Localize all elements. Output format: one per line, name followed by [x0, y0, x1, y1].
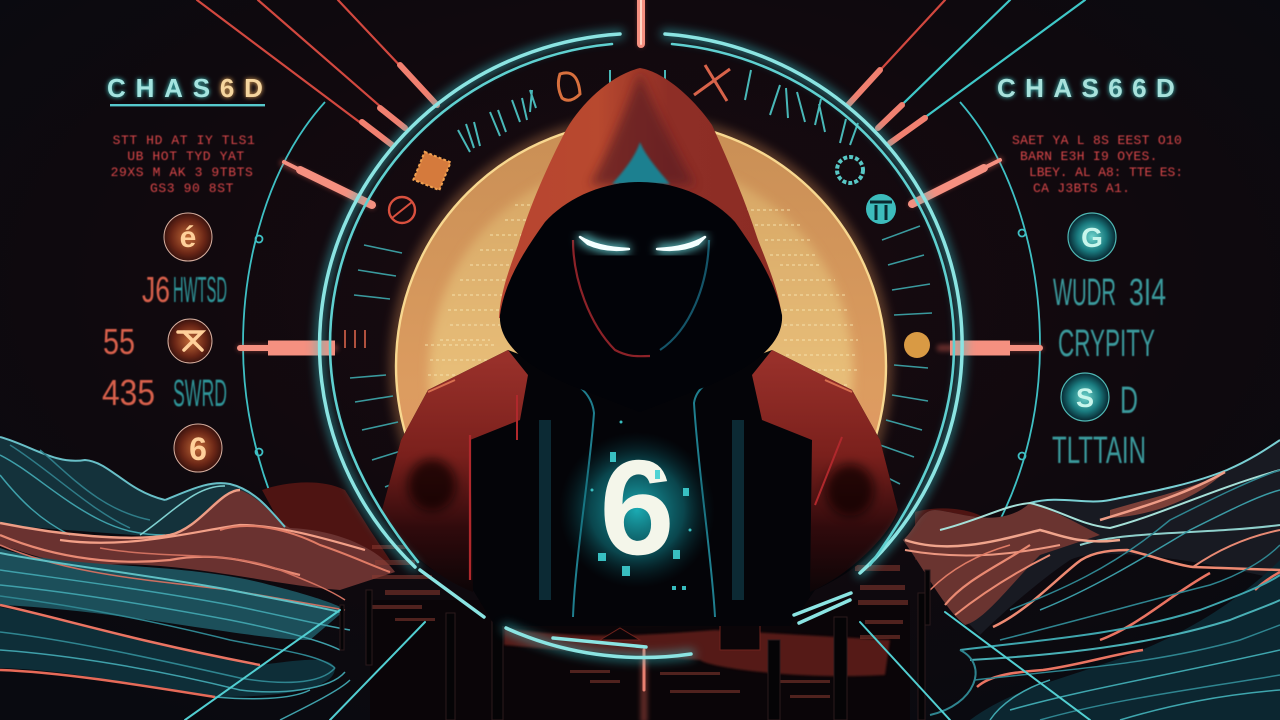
teal glyph clusters: [458, 70, 665, 152]
right title: CHAS66D: [997, 73, 1184, 103]
left paragraph: STT HD AT IY TLS1: [113, 133, 255, 148]
right icons: S: [1076, 383, 1094, 413]
right title: CHAS66D: [997, 73, 1184, 103]
hooded figure: [382, 68, 898, 626]
ruined city at bottom: [340, 545, 930, 720]
text: HWTSD: [173, 269, 227, 310]
right sleeve: [752, 350, 898, 592]
right paragraph: [1012, 133, 1183, 196]
right icons: G: [1081, 222, 1103, 253]
left sleeve: [382, 350, 528, 592]
right paragraph: LBEY. AL A8: TTE ES:: [1029, 165, 1183, 180]
left labels: [102, 269, 227, 415]
orange knot icon: [558, 73, 580, 100]
left red mound: [262, 482, 390, 560]
left paragraph: 29XS M AK 3 9TBTS: [111, 165, 253, 180]
left paragraph: [111, 133, 255, 196]
small orange dial: [904, 332, 930, 358]
jacket base: [382, 350, 898, 626]
right labels: TLTTAIN: [1052, 430, 1146, 472]
right labels: [1052, 272, 1166, 472]
left wave field: [0, 437, 395, 720]
left labels: J6: [142, 269, 170, 310]
hood: [499, 68, 782, 318]
main neon ring: [320, 34, 962, 658]
left icons: [164, 213, 222, 472]
sun script lines: [425, 205, 858, 400]
left paragraph: GS3 90 8ST: [150, 181, 234, 196]
teal flower icon: [837, 157, 863, 183]
jacket seams: [428, 380, 852, 580]
right ticks: [872, 226, 932, 484]
left title: CHAS6D: [107, 73, 273, 103]
glowing 6: [559, 432, 715, 588]
right labels: WUDR: [1053, 272, 1116, 314]
right red mound: [915, 508, 990, 560]
hood opening: [500, 182, 782, 412]
sun disc behind figure: [389, 114, 893, 618]
left labels: 55: [103, 321, 135, 362]
right labels: 3I4: [1129, 272, 1166, 314]
jacket shadow patches: [408, 459, 874, 516]
left icons: é: [180, 221, 196, 254]
right labels: D: [1120, 380, 1138, 422]
left title: CHAS6D: [107, 73, 273, 103]
left ticks: [350, 245, 410, 487]
eyes: [580, 237, 705, 250]
mask: [573, 240, 709, 356]
bottom teal rays: [185, 610, 1090, 720]
right paragraph: CA J3BTS A1.: [1033, 181, 1130, 196]
right icons: [1061, 213, 1116, 421]
hood crown shading: [590, 72, 695, 185]
right paragraph: BARN E3H I9 OYES.: [1020, 149, 1158, 164]
right labels: CRYPITY: [1058, 323, 1155, 365]
sparkles: [590, 420, 692, 590]
orange hatched icon: [413, 152, 451, 190]
towers: [340, 570, 930, 720]
red circle icon: [389, 197, 415, 223]
right wave field: [903, 440, 1280, 720]
left icons: 6: [189, 431, 207, 467]
teal circle icon: [866, 194, 896, 224]
inner ring ticks and symbols: [345, 65, 932, 487]
zipper collars: [525, 350, 756, 617]
neon pink bars and rays: [185, 0, 1090, 720]
glowing 6: 6: [599, 432, 675, 583]
left paragraph: UB HOT TYD YAT: [127, 149, 245, 164]
hood teal crown: [612, 142, 670, 184]
text: SWRD: [173, 373, 227, 415]
red cross icon: [694, 65, 730, 101]
right paragraph: SAET YA L 8S EEST O10: [1012, 133, 1182, 148]
outer thin arcs: [243, 102, 1040, 527]
left labels: 435: [102, 372, 155, 413]
